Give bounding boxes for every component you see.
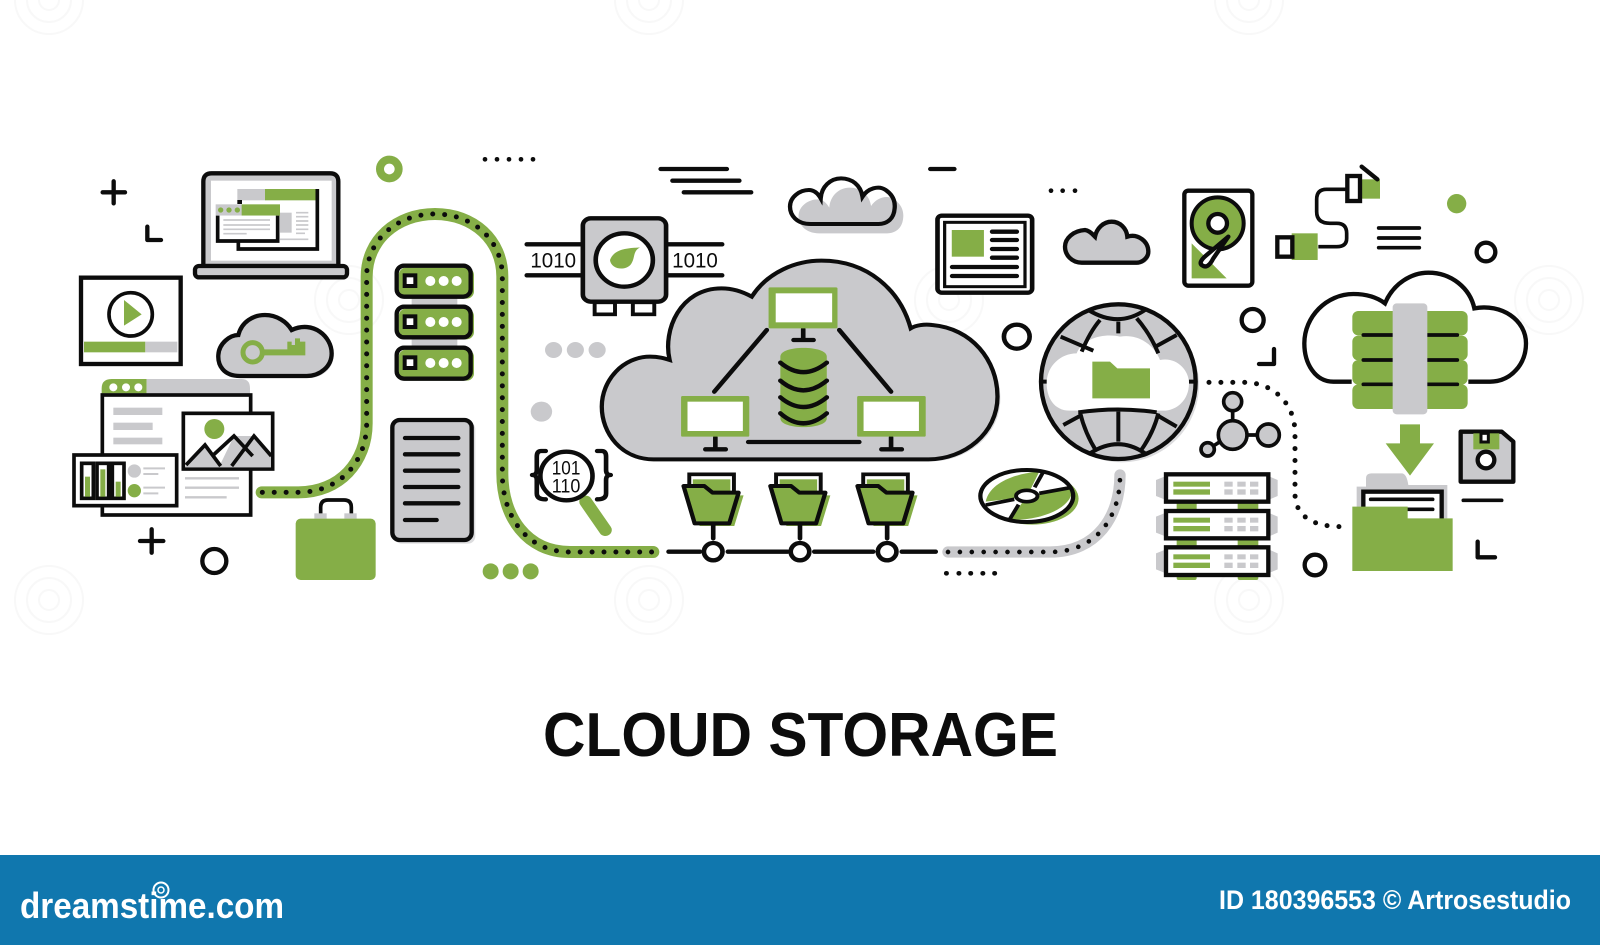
icon: cloud with key [218,315,334,378]
icon: ring bottom [202,549,226,573]
icon: laptop [195,173,347,277]
icon: main cloud network [602,261,1000,461]
icon: video player [81,278,181,364]
right illustration cluster [948,167,1526,580]
icon: folder one [684,474,744,526]
icon: magnifier with binary [532,451,611,530]
icon: small cloud [1065,222,1150,265]
icon: processor with binary: 1010 [530,248,576,272]
icon: hard drive [1184,191,1252,286]
icon: cloud with database [1304,273,1526,414]
arrow: download [1386,424,1434,476]
icon: floppy disk [1461,432,1513,482]
speed lines [661,169,751,192]
left illustration cluster [74,157,653,580]
corner mark [1478,542,1495,557]
icon: folder two [770,474,830,526]
dash [930,162,954,175]
title: CLOUD STORAGE [543,701,1058,770]
ring by globe [1242,309,1264,331]
icon: processor with binary: 1010 [672,248,718,272]
green dot [1447,194,1466,213]
icon: processor with binary [527,218,722,314]
centre illustration cluster [527,169,1079,576]
image credit: ID 180396553 © Artrosestudio [1219,885,1571,915]
icon: usb cable [1277,167,1380,260]
icon: server rack [1156,474,1278,580]
corner mark [1259,349,1274,364]
icon: molecule network [1201,393,1279,456]
icon: small cloud top [790,178,903,233]
icon: plus bottom [140,529,163,553]
grey dotted connector [948,475,1120,552]
dash under floppy [1463,495,1502,506]
green dots [483,563,539,579]
folder connection line with nodes [669,525,936,560]
icon: server stack [397,266,474,381]
dotted row top [483,157,535,162]
icon: ring middle [1004,325,1030,349]
icon: folder with files [1352,473,1453,571]
grey dots [531,342,606,422]
icon: briefcase [296,500,376,580]
dotted row lower [944,571,997,576]
footer banner [0,855,1600,945]
icon: lines menu [1379,228,1419,248]
icon: globe with cloud folder [1041,304,1199,462]
icon: tablet article [937,216,1032,293]
ring upper right [1477,243,1495,261]
icon: magnifier with binary: 110 [552,476,580,497]
icon: corner mark [147,227,161,240]
dots top [1049,188,1077,193]
ring bottom [1305,555,1325,575]
logo: dreamstime: dreamstime.com [20,885,284,926]
green dotted connector path [262,214,653,552]
dotted line to folder [1209,382,1342,527]
icon: browser windows [74,379,273,515]
icon: optical disc [980,470,1079,525]
icon: document panel [392,420,475,544]
icon: magnifier with binary: 101 [552,458,580,479]
icon: green ring [380,160,399,178]
icon: folder three [857,474,917,526]
icon: plus top [103,181,125,203]
